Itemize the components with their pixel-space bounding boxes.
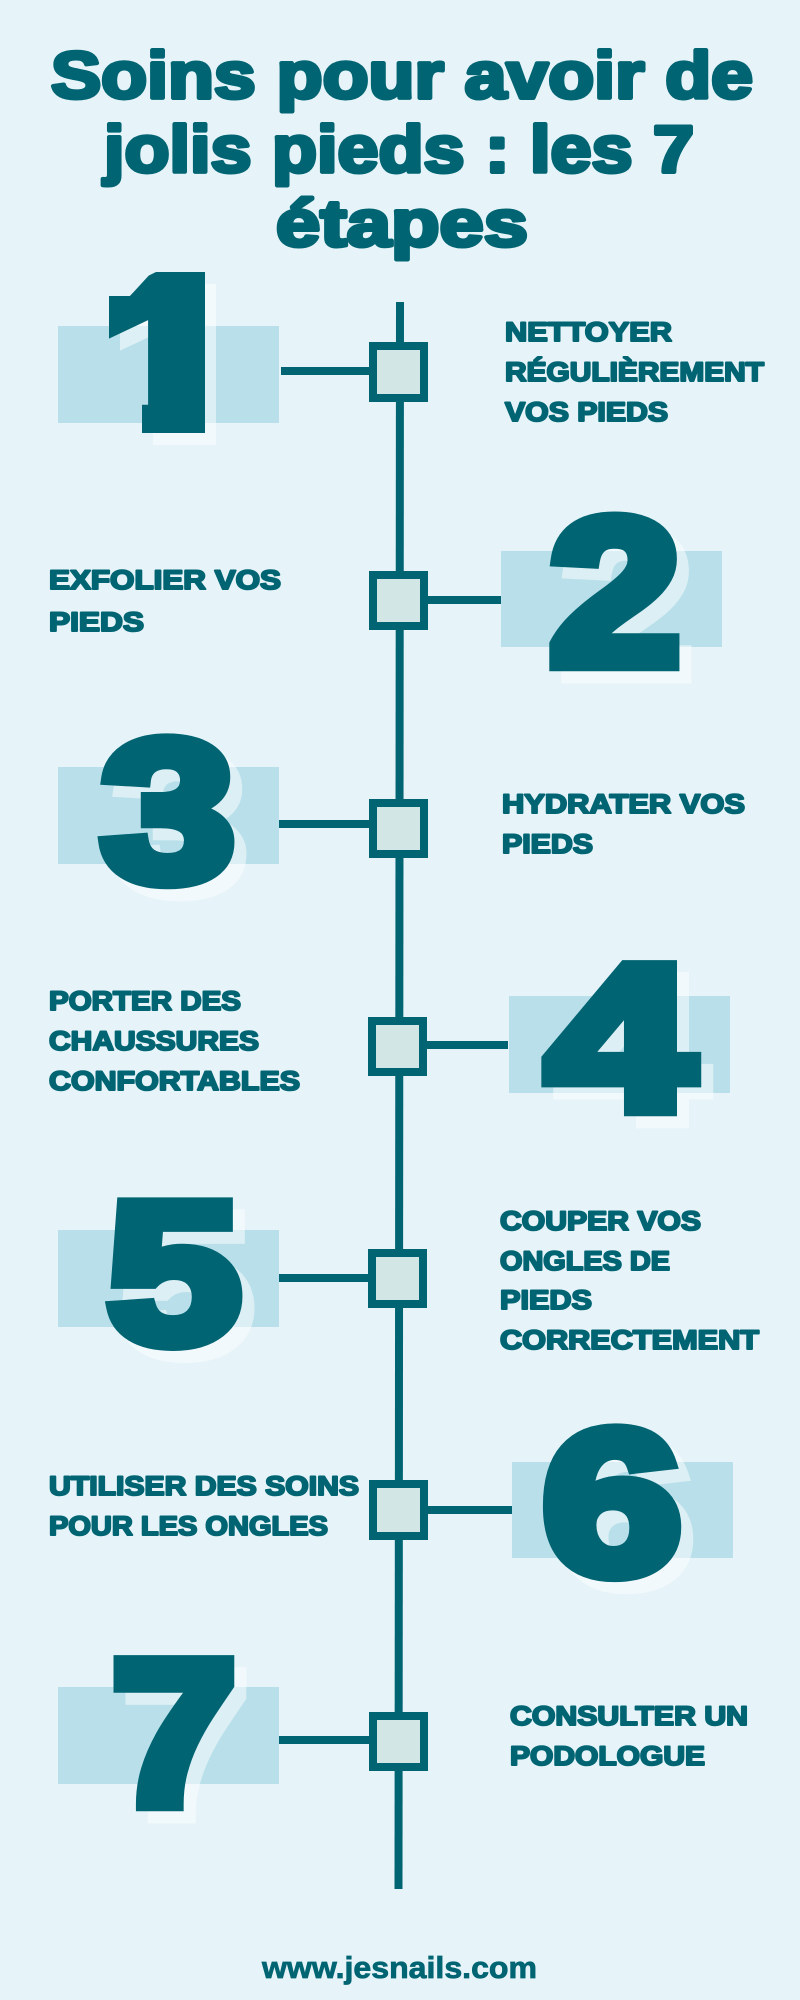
marker 6: [373, 1484, 424, 1536]
connector 4: [427, 1041, 508, 1049]
connector 3: [279, 820, 369, 828]
title: étapes: [276, 186, 528, 260]
number 4 panel: 4: [559, 936, 705, 1165]
website footer: www.jesnails.com: [261, 1950, 537, 1985]
text 3: [502, 789, 745, 859]
text 3: PIEDS: [502, 829, 593, 859]
number 6 panel: 6: [542, 1389, 682, 1617]
text 6: [49, 1471, 359, 1541]
number 1 panel: [58, 272, 279, 445]
step 5: [58, 1161, 760, 1397]
connector 5: [279, 1274, 368, 1282]
text 6: UTILISER DES SOINS: [49, 1471, 359, 1501]
text 4: CONFORTABLES: [49, 1066, 300, 1096]
text 2: EXFOLIER VOS: [49, 565, 281, 595]
text 5: COUPER VOS: [500, 1206, 701, 1236]
text 5: PIEDS: [500, 1285, 592, 1315]
number 5 panel: 5: [107, 1161, 241, 1385]
text 6: POUR LES ONGLES: [49, 1511, 328, 1541]
connector 2: [428, 596, 501, 604]
connector 1: [281, 367, 369, 375]
marker 5: [372, 1253, 423, 1304]
marker 1: [373, 346, 424, 398]
number 4 panel: [509, 924, 730, 1165]
number 4 panel: 4: [547, 924, 693, 1153]
step 7: [58, 1617, 748, 1860]
text 1: [505, 317, 765, 427]
number 1 panel: 1: [100, 243, 266, 497]
step 1: [58, 272, 765, 445]
text 1: VOS PIEDS: [505, 397, 668, 427]
timeline vertical line: [398, 302, 400, 1889]
number 3 panel: 3: [113, 711, 247, 935]
number 3 panel: [58, 699, 279, 935]
number 7 panel: [58, 1617, 279, 1860]
text 3: HYDRATER VOS: [502, 789, 745, 819]
text 4: [49, 986, 300, 1096]
connector 6: [428, 1506, 512, 1514]
marker 7: [373, 1716, 424, 1767]
text 5: CORRECTEMENT: [500, 1325, 760, 1355]
step 3: [58, 699, 745, 935]
title: Soins pour avoir de: [51, 38, 753, 112]
number 2 panel: [501, 477, 722, 721]
number 7 panel: 7: [124, 1629, 248, 1860]
text 1: RÉGULIÈREMENT: [505, 356, 765, 387]
number 7 panel: 7: [112, 1617, 236, 1848]
title: jolis pieds : les 7: [102, 112, 694, 186]
text 4: CHAUSSURES: [49, 1026, 259, 1056]
text 7: [510, 1701, 748, 1771]
number 5 panel: 5: [119, 1173, 253, 1397]
number 6 panel: 6: [554, 1401, 694, 1629]
step 4: [49, 924, 730, 1165]
number 1 panel: 1: [89, 231, 255, 485]
text 2: [49, 565, 281, 637]
number 2 panel: 2: [549, 477, 681, 709]
text 2: PIEDS: [49, 607, 144, 637]
number 5 panel: [58, 1161, 279, 1397]
marker 2: [373, 575, 424, 626]
text 5: [500, 1206, 760, 1355]
text 5: ONGLES DE: [500, 1246, 670, 1276]
title: [51, 38, 753, 260]
marker 3: [373, 803, 424, 854]
step 6: [49, 1389, 733, 1629]
text 4: PORTER DES: [49, 986, 241, 1016]
text 7: CONSULTER UN: [510, 1701, 748, 1731]
connector 7: [279, 1736, 369, 1744]
number 6 panel: [512, 1389, 733, 1629]
number 3 panel: 3: [101, 699, 235, 923]
step 2: [49, 477, 722, 721]
text 7: PODOLOGUE: [510, 1741, 705, 1771]
marker 4: [372, 1021, 423, 1072]
text 1: NETTOYER: [505, 317, 672, 347]
number 2 panel: 2: [561, 489, 693, 721]
